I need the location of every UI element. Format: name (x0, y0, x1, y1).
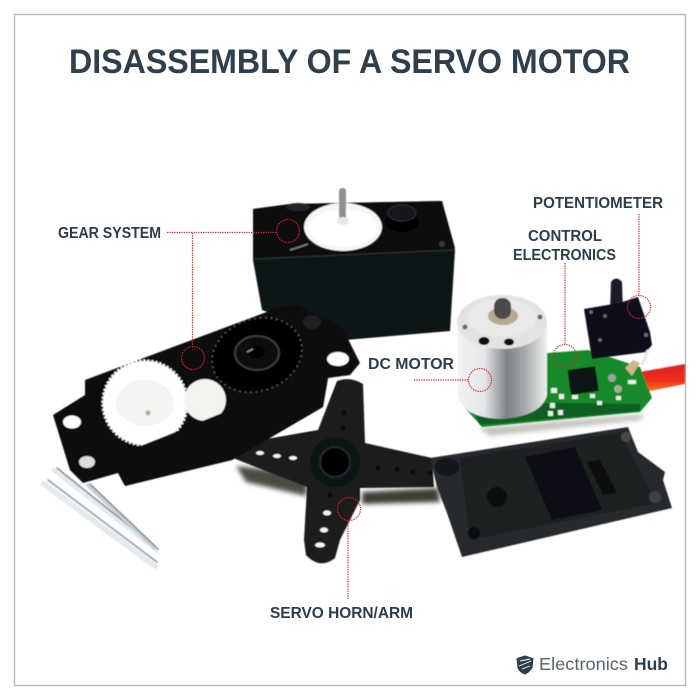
label: DC motor: DC MOTOR (368, 356, 454, 373)
part: lower gearbox housing (53, 305, 360, 486)
part: mounting screws (44, 468, 158, 566)
label: control electronics: ELECTRONICS (513, 247, 616, 264)
callout: servo horn/arm (270, 498, 413, 622)
label: servo horn/arm: SERVO HORN/ARM (270, 605, 413, 622)
logo: Electronics Hub: Hub (634, 654, 668, 674)
icon: shield (516, 655, 534, 675)
label: control electronics: CONTROL (528, 228, 602, 245)
part: potentiometer (584, 278, 652, 365)
logo: Electronics Hub (516, 654, 668, 675)
photo: disassembled servo motor parts (44, 188, 685, 566)
part: upper gearbox housing (253, 188, 455, 340)
title: DISASSEMBLY OF A SERVO MOTOR (69, 43, 630, 81)
part: servo horn arm (232, 379, 434, 563)
logo: Electronics Hub: Electronics (539, 654, 628, 674)
part: horn and hardware shadows (236, 414, 645, 504)
part: red servo wires (640, 364, 685, 392)
callout: control electronics (513, 228, 616, 368)
callout: potentiometer (533, 195, 663, 318)
part: bottom cover plate (430, 427, 672, 557)
callout: DC motor (368, 356, 492, 392)
callout: gear system (58, 220, 300, 370)
part: DC motor (457, 295, 547, 419)
label: gear system: GEAR SYSTEM (58, 225, 161, 242)
part: green control circuit board (465, 350, 652, 427)
label: potentiometer: POTENTIOMETER (533, 195, 663, 212)
